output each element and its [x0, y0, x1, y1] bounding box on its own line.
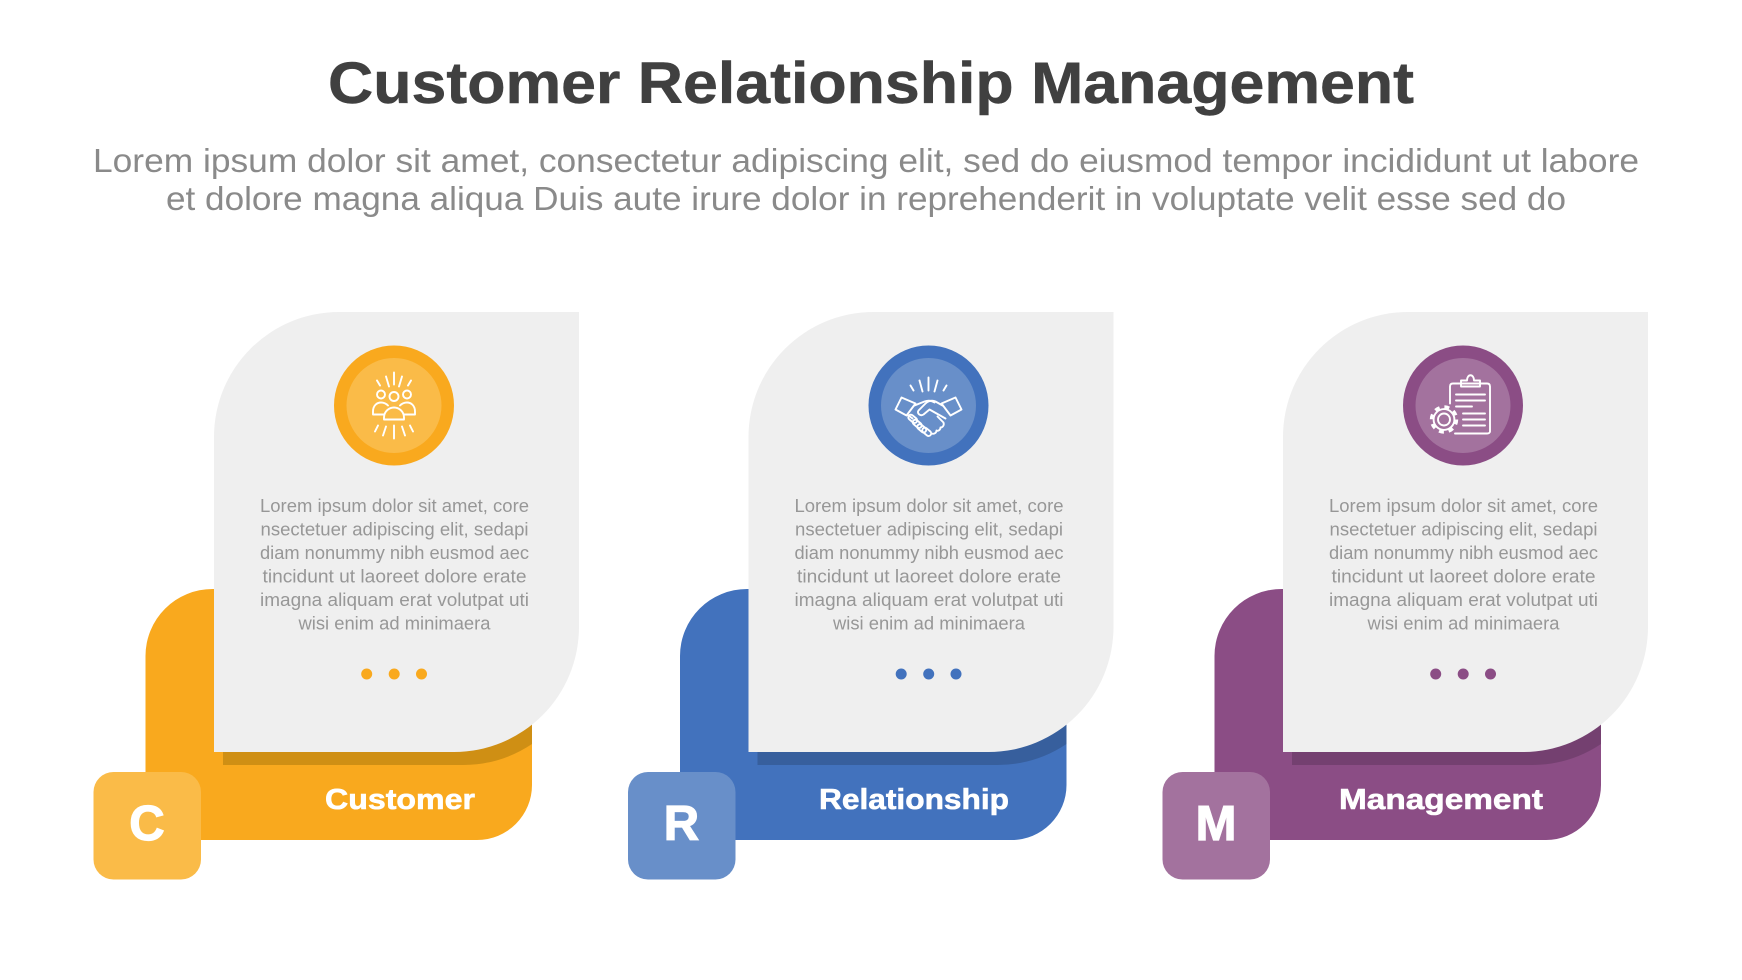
title: Customer Relationship Management	[328, 51, 1414, 116]
subtitle	[93, 142, 1639, 217]
body text: relationship	[794, 496, 1064, 634]
card: customer	[214, 312, 579, 752]
subtitle: Lorem ipsum dolor sit amet, consectetur adipiscing elit, sed do eiusmod tempor incididunt ut labore	[93, 142, 1639, 179]
body text: management: imagna aliquam erat volutpat uti	[1329, 590, 1598, 610]
dots: relationship	[896, 668, 962, 680]
body text: customer: nsectetuer adipiscing elit, sedapi	[260, 520, 528, 540]
body text: customer: Lorem ipsum dolor sit amet, core	[260, 496, 529, 516]
letter tile: R	[628, 772, 736, 880]
card: relationship	[748, 312, 1114, 752]
colour band: customer	[146, 589, 532, 840]
body text: relationship: tincidunt ut laoreet dolore erate	[797, 566, 1061, 586]
card shadow: relationship	[758, 715, 1066, 765]
body text: relationship: imagna aliquam erat volutpat uti	[794, 590, 1064, 610]
body text: relationship: nsectetuer adipiscing elit, sedapi	[795, 520, 1063, 540]
body text: customer: imagna aliquam erat volutpat uti	[260, 590, 529, 610]
card shadow: management	[1292, 715, 1601, 765]
label: relationship: Relationship	[819, 784, 1009, 816]
body text: management: wisi enim ad minimaera	[1366, 614, 1561, 634]
letter tile: C	[94, 772, 201, 880]
body text: relationship: Lorem ipsum dolor sit amet, core	[794, 496, 1064, 516]
body text: relationship: diam nonummy nibh eusmod aec	[794, 543, 1064, 563]
panel: management	[1162, 312, 1648, 880]
body text: management: diam nonummy nibh eusmod aec	[1329, 543, 1598, 563]
dots: management	[1430, 668, 1496, 680]
body text: management: tincidunt ut laoreet dolore erate	[1332, 566, 1596, 586]
body text: customer: diam nonummy nibh eusmod aec	[260, 543, 529, 563]
letter tile: R: R	[664, 797, 699, 851]
panel: relationship	[628, 312, 1114, 880]
label: customer: Customer	[325, 784, 475, 816]
icon: clipboard and gear	[1403, 346, 1523, 466]
dots: customer	[361, 668, 427, 680]
panel: customer	[94, 312, 579, 880]
body text: management: nsectetuer adipiscing elit, sedapi	[1330, 520, 1598, 540]
subtitle: et dolore magna aliqua Duis aute irure dolor in reprehenderit in voluptate velit esse sed do	[166, 180, 1566, 217]
body text: relationship: wisi enim ad minimaera	[832, 614, 1026, 634]
colour band: relationship	[680, 589, 1066, 840]
icon: customer group	[334, 346, 454, 466]
letter tile: M: M	[1196, 797, 1236, 851]
label: management: Management	[1339, 784, 1543, 816]
icon: handshake	[868, 346, 988, 466]
body text: customer: tincidunt ut laoreet dolore erate	[262, 566, 526, 586]
letter tile: M	[1162, 772, 1270, 880]
body text: customer	[260, 496, 529, 634]
body text: management	[1329, 496, 1598, 634]
card: management	[1283, 312, 1648, 752]
body text: customer: wisi enim ad minimaera	[297, 614, 492, 634]
body text: management: Lorem ipsum dolor sit amet, core	[1329, 496, 1598, 516]
card shadow: customer	[223, 715, 532, 765]
colour band: management	[1214, 589, 1601, 840]
letter tile: C: C	[129, 797, 165, 851]
